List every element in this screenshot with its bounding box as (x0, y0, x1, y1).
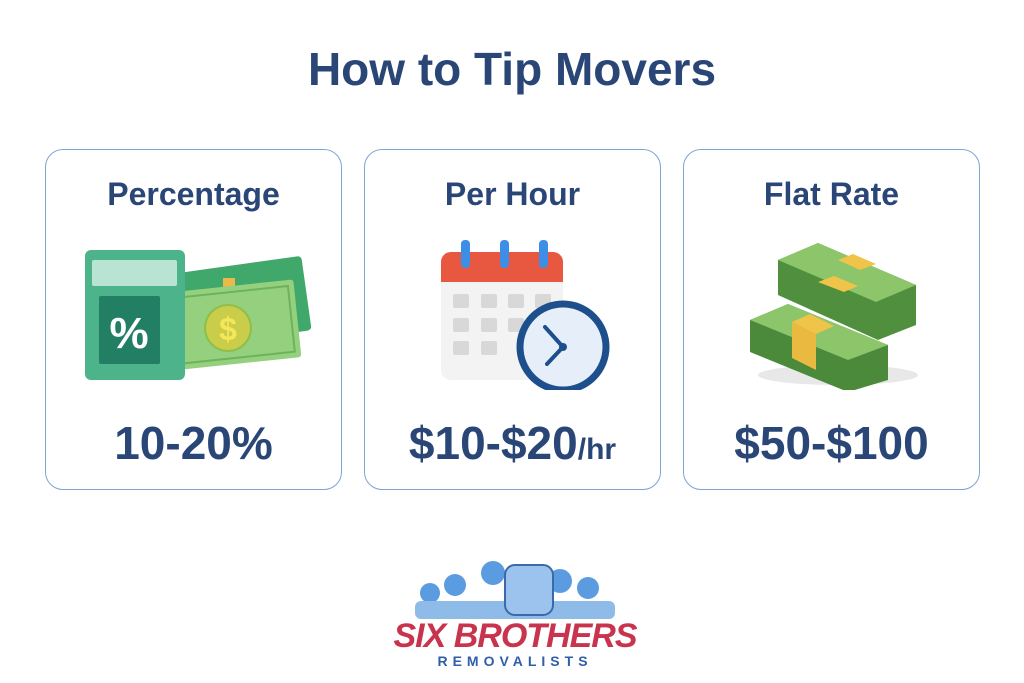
logo wordmark: SIX BROTHERS (393, 617, 637, 655)
icon: calculator and money (85, 250, 312, 380)
title: How to Tip Movers (308, 43, 716, 95)
logo movers illustration (415, 561, 615, 619)
panel: percentage (45, 149, 342, 490)
value: flat rate: $50-$100 (734, 417, 929, 469)
panel: flat rate (683, 149, 980, 490)
icon: calculator and money: $ (219, 311, 237, 347)
heading: flat rate: Flat Rate (764, 176, 899, 212)
value: percentage: 10-20% (114, 417, 273, 469)
logo: six brothers removalists (393, 561, 638, 669)
heading: per hour: Per Hour (445, 176, 580, 212)
panel: per hour (364, 149, 661, 490)
icon: calculator and money: % (109, 309, 149, 358)
icon: money stacks (750, 243, 918, 390)
logo subtitle: REMOVALISTS (437, 653, 593, 669)
icon: calendar and clock (441, 240, 610, 390)
value: per hour: $10-$20/hr (409, 417, 616, 469)
heading: percentage: Percentage (107, 176, 280, 212)
